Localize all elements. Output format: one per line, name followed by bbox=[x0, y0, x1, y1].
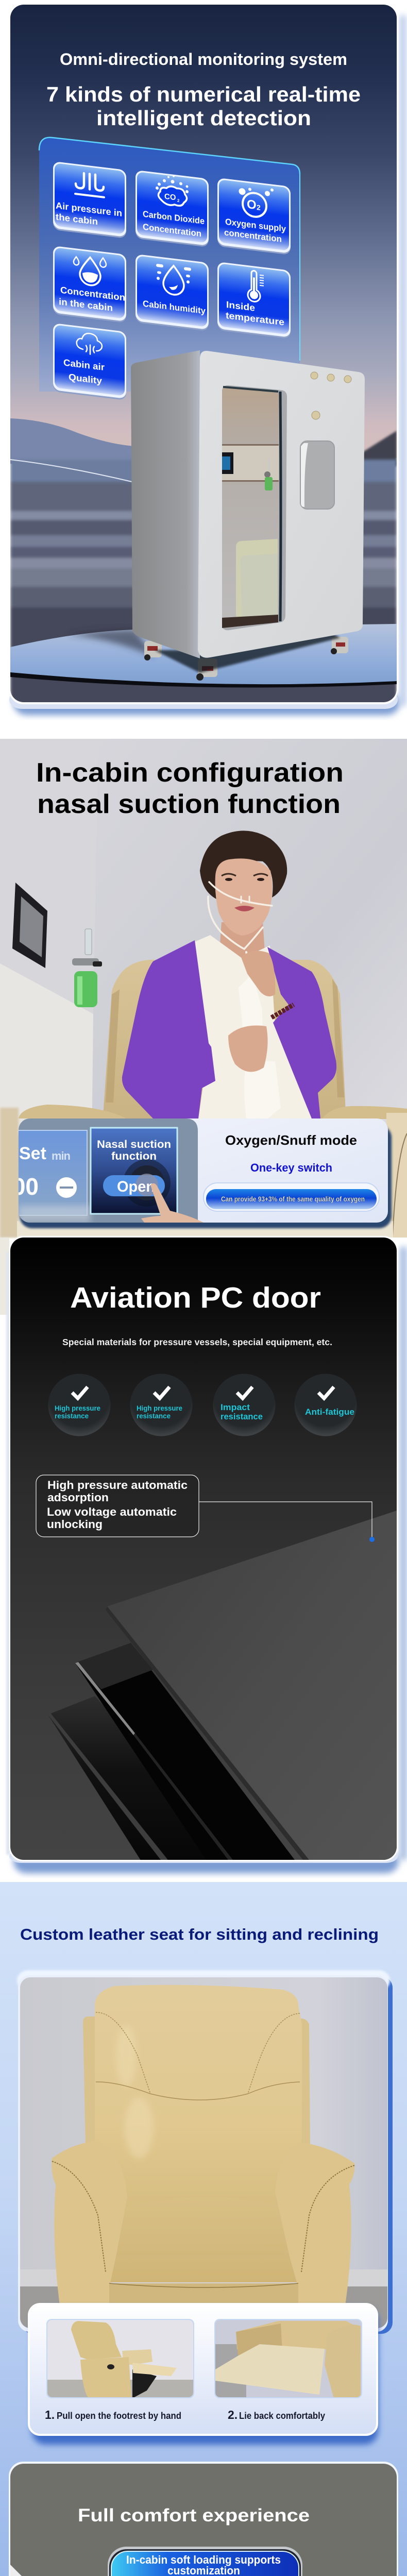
title: nasal suction function bbox=[37, 789, 341, 819]
tile: set minutes bbox=[19, 1130, 88, 1216]
step one caption: Pull open the footrest by hand bbox=[57, 2411, 181, 2421]
heading line one: Omni-directional monitoring system bbox=[60, 50, 347, 69]
seat cushion bbox=[110, 2215, 297, 2282]
purple cardigan left with sleeve bbox=[122, 940, 215, 1118]
feature: anti-fatigue bbox=[295, 1374, 357, 1436]
left side wall bbox=[0, 739, 98, 1014]
feature: high pressure resistance two: High pressure bbox=[137, 1404, 182, 1412]
middle plate bbox=[75, 1643, 295, 1860]
title: Full comfort experience bbox=[78, 2505, 310, 2526]
tile: cabin humidity bbox=[135, 254, 209, 331]
background water stripes bbox=[10, 460, 397, 705]
tile: cabin air quality bbox=[53, 323, 126, 400]
tile: concentration in cabin bbox=[53, 246, 126, 323]
callout: High pressure automatic bbox=[47, 1479, 188, 1492]
footrest bbox=[132, 2363, 177, 2376]
heading line two: 7 kinds of numerical real-time bbox=[46, 82, 361, 106]
pill: oxygen quality: Can provide 93+3% of the same quality of oxygen bbox=[221, 1195, 365, 1203]
lower hand bbox=[228, 1025, 268, 1072]
label: cabin air quality: Cabin air bbox=[63, 357, 105, 372]
side body bbox=[80, 2357, 131, 2398]
step two caption: 2. bbox=[228, 2408, 238, 2421]
label: oxygen supply: Oxygen supply bbox=[225, 217, 286, 234]
platform disc bbox=[10, 624, 397, 687]
tile: nasal suction: function bbox=[111, 1150, 157, 1162]
step one caption bbox=[45, 2408, 181, 2421]
step two caption: Lie back comfortably bbox=[239, 2411, 325, 2421]
feature: high pressure resistance one: resistance bbox=[55, 1412, 89, 1420]
pill: oxygen quality bbox=[204, 1183, 379, 1211]
icon: O2 bubble bbox=[239, 184, 274, 219]
facial features bbox=[222, 874, 268, 911]
machine side face bbox=[131, 350, 200, 658]
mechanism bbox=[132, 2369, 157, 2398]
label: air pressure: the cabin bbox=[56, 212, 98, 227]
label: cabin air quality bbox=[63, 357, 105, 386]
feature: impact resistance: Impact bbox=[221, 1402, 250, 1412]
tile: nasal suction bbox=[91, 1128, 177, 1214]
nasal cannula bbox=[208, 882, 272, 1061]
bracelet bbox=[272, 1005, 294, 1018]
label: oxygen supply bbox=[224, 217, 286, 245]
machine front face bbox=[198, 351, 365, 658]
label: carbon dioxide bbox=[143, 209, 205, 239]
tile: nasal suction: Nasal suction bbox=[97, 1139, 171, 1150]
front arm bbox=[122, 2349, 152, 2365]
label: cabin air quality: Quality bbox=[69, 372, 102, 386]
tile: oxygen supply bbox=[217, 178, 291, 255]
feature: anti-fatigue: Anti-fatigue bbox=[305, 1407, 354, 1417]
background dunes bbox=[10, 418, 131, 464]
label: oxygen supply: concentration bbox=[224, 228, 282, 244]
customization pill bbox=[108, 2547, 302, 2576]
title bbox=[36, 758, 344, 819]
oxygen cabin machine bbox=[131, 350, 365, 681]
feature: high pressure resistance one bbox=[48, 1374, 110, 1436]
label: inside temperature bbox=[226, 299, 284, 328]
callout: adsorption bbox=[47, 1491, 109, 1504]
purple cardigan right with sleeve bbox=[267, 947, 336, 1118]
recline steps panel bbox=[29, 2304, 378, 2445]
large top plate bbox=[106, 1511, 397, 1860]
right arm bbox=[275, 2142, 354, 2306]
seams bbox=[96, 2012, 300, 2100]
woman bbox=[122, 831, 336, 1118]
label: inside temperature: temperature bbox=[226, 310, 284, 328]
callout connector bbox=[199, 1502, 375, 1542]
pointing hand bbox=[141, 1183, 204, 1223]
label: carbon dioxide: Concentration bbox=[143, 222, 201, 239]
icon: CO2 cloud: CO bbox=[164, 192, 176, 202]
touch screen backdrop bbox=[19, 1118, 198, 1223]
section: aviation PC door card bbox=[6, 1236, 407, 1906]
icon: water drops bbox=[74, 255, 106, 287]
label: concentration in cabin: Concentration bbox=[60, 285, 125, 303]
feature: impact resistance bbox=[213, 1374, 275, 1436]
icon: pressure bbox=[75, 172, 104, 197]
lower plate bbox=[48, 1696, 206, 1860]
icon: O2 bubble: 2 bbox=[257, 203, 261, 212]
photo card bbox=[17, 1970, 393, 2334]
label: air pressure: Air pressure in bbox=[56, 200, 122, 218]
upper hand bbox=[241, 951, 275, 996]
label: carbon dioxide: Carbon Dioxide bbox=[143, 209, 205, 226]
hair bbox=[200, 831, 287, 899]
feature: high pressure resistance two: resistance bbox=[137, 1412, 171, 1420]
icon: O2 bubble: O bbox=[247, 197, 257, 212]
chair back and headrest bbox=[95, 1985, 302, 2215]
machine small window bbox=[300, 441, 334, 509]
icon: CO2 cloud: 2 bbox=[177, 198, 180, 203]
section: monitoring system card bbox=[9, 4, 406, 715]
feature: high pressure resistance two bbox=[130, 1374, 193, 1436]
icon: CO2 cloud bbox=[156, 173, 189, 207]
callout: unlocking bbox=[47, 1518, 103, 1531]
baseboard and floor bbox=[20, 2269, 387, 2333]
callout: Low voltage automatic bbox=[47, 1505, 177, 1518]
armchair bbox=[52, 1985, 354, 2306]
icon: thermometer bbox=[248, 270, 264, 303]
neck bbox=[219, 922, 265, 969]
upper scarf bbox=[239, 974, 263, 1061]
photo background wall bbox=[0, 739, 407, 1237]
cabin screen bbox=[222, 452, 233, 474]
hologram panel bbox=[39, 138, 300, 613]
customization pill: In-cabin soft loading supports bbox=[126, 2553, 281, 2566]
label: cabin humidity: Cabin humidity bbox=[143, 299, 206, 316]
face bbox=[215, 858, 272, 936]
callout bbox=[36, 1475, 199, 1537]
label: air pressure bbox=[56, 200, 122, 230]
control panel bar bbox=[5, 1118, 392, 1228]
section: full comfort card bbox=[9, 2462, 398, 2576]
wall tablet bbox=[12, 883, 47, 968]
icon: cloud bbox=[77, 332, 102, 355]
machine edge glow bbox=[195, 443, 198, 582]
lower scarf bbox=[244, 1060, 281, 1118]
corner highlight bbox=[10, 2565, 22, 2576]
label: concentration in cabin: in the cabin bbox=[59, 296, 113, 313]
recliner chair bbox=[17, 960, 407, 1238]
machine window bbox=[222, 385, 287, 630]
step image two bbox=[214, 2319, 362, 2398]
icon: humidity drop bbox=[156, 264, 191, 297]
label: concentration in cabin bbox=[59, 284, 125, 315]
tile: set minutes: Set bbox=[19, 1144, 46, 1163]
feature: high pressure resistance one: High pressure bbox=[55, 1404, 100, 1412]
step two caption bbox=[228, 2408, 325, 2421]
heading: oxygen snuff mode: Oxygen/Snuff mode bbox=[225, 1132, 357, 1148]
step one caption: 1. bbox=[45, 2408, 55, 2421]
background sky bbox=[10, 5, 397, 458]
leather highlights bbox=[116, 2025, 154, 2159]
tile: set minutes: 00 bbox=[12, 1173, 39, 1200]
left margin strip bbox=[0, 1238, 9, 1882]
feature: impact resistance: resistance bbox=[221, 1412, 263, 1421]
section: leather seat bbox=[0, 1882, 407, 2576]
title: Custom leather seat for sitting and reclining bbox=[20, 1925, 379, 1943]
heading line three: intelligent detection bbox=[96, 106, 311, 130]
chair wings bbox=[83, 2016, 310, 2146]
step image one bbox=[46, 2319, 194, 2400]
background right mountain bbox=[364, 430, 397, 468]
machine wheels bbox=[144, 637, 348, 681]
tile: air pressure bbox=[53, 161, 126, 239]
tile: set minutes: min bbox=[52, 1149, 71, 1162]
subheading: one-key switch: One-key switch bbox=[250, 1161, 332, 1174]
tile: inside temperature bbox=[217, 262, 291, 339]
section: nasal suction photo bbox=[0, 739, 407, 1238]
title: In-cabin configuration bbox=[36, 758, 344, 788]
machine knobs bbox=[311, 372, 351, 419]
cabin oxygen bottle bbox=[264, 459, 273, 490]
blouse bbox=[195, 935, 312, 1118]
left arm bbox=[52, 2141, 127, 2306]
wall oxygen flowmeter bbox=[72, 929, 102, 1007]
label: inside temperature: Inside bbox=[226, 299, 255, 313]
chair back bbox=[71, 2321, 122, 2360]
tile: nasal suction: Open bbox=[117, 1178, 155, 1195]
subtitle: Special materials for pressure vessels, special equipment, etc. bbox=[62, 1337, 332, 1347]
footrest bbox=[109, 2283, 298, 2303]
arm stitching bbox=[52, 2161, 354, 2272]
title: Aviation PC door bbox=[70, 1281, 321, 1314]
tile: carbon dioxide bbox=[135, 170, 209, 247]
